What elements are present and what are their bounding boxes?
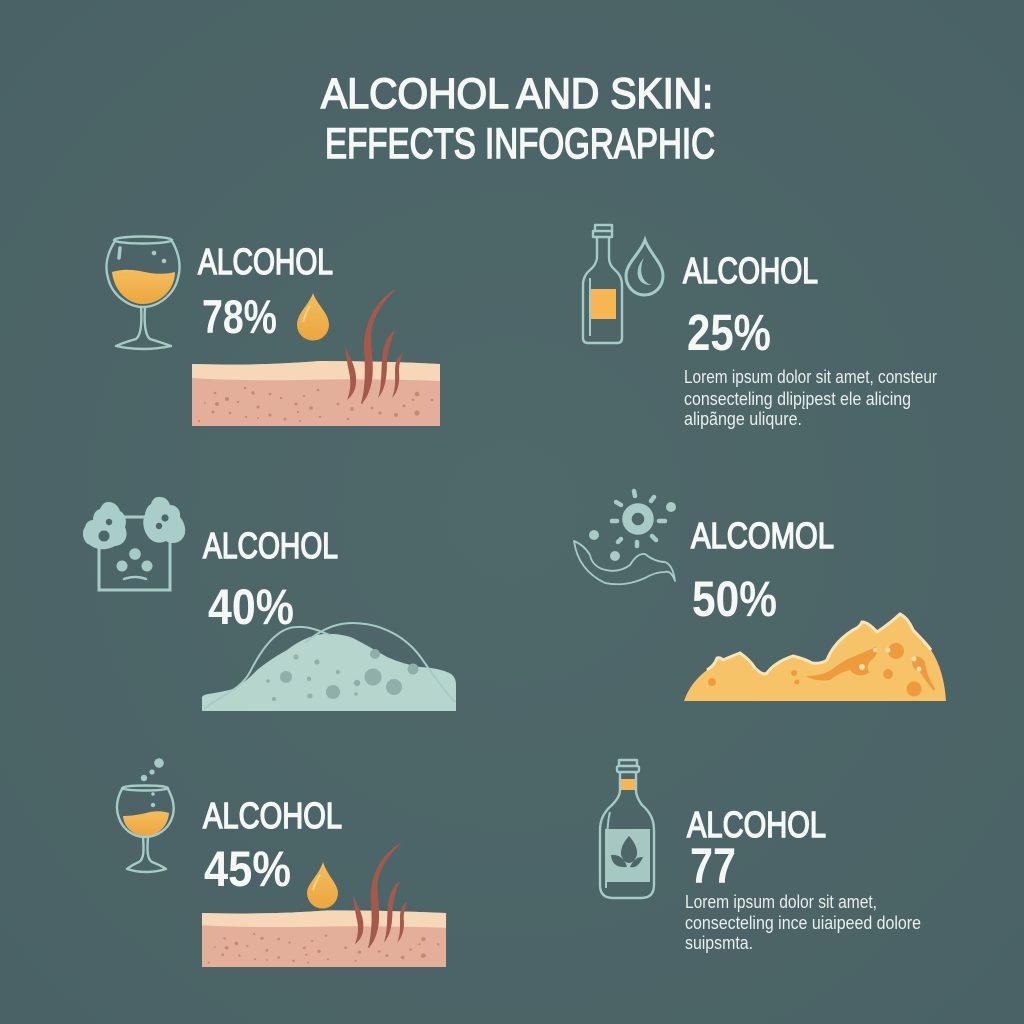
icon: bottle with leaf label bbox=[600, 760, 654, 898]
icon: bottle and drop bbox=[583, 225, 663, 343]
heading: ALCOHOL bbox=[203, 525, 338, 566]
percentage: 40% bbox=[208, 579, 294, 635]
percentage: 45% bbox=[204, 841, 291, 897]
heading: ALCOHOL bbox=[687, 804, 826, 845]
body text bbox=[684, 367, 937, 429]
panel: face 40% bbox=[83, 497, 456, 711]
irritated skin mound bbox=[684, 614, 946, 701]
heading: ALCOMOL bbox=[691, 515, 834, 556]
hair strands bbox=[353, 842, 407, 948]
title: EFFECTS INFOGRAPHIC bbox=[325, 120, 715, 168]
skin cross-section bbox=[202, 910, 446, 967]
title bbox=[321, 70, 715, 168]
icon: drop bbox=[297, 293, 329, 340]
body text: consecteling ince uiaipeed dolore bbox=[685, 913, 921, 933]
icon: sun and wave bbox=[574, 491, 676, 584]
hair strands bbox=[345, 288, 403, 404]
icon: acne face bbox=[83, 497, 185, 590]
icon: wine glass with bubbles bbox=[117, 758, 174, 872]
panel: sun 50% bbox=[574, 491, 946, 701]
title: ALCOHOL AND SKIN: bbox=[321, 70, 713, 118]
body text: alipãnge uliqure. bbox=[684, 409, 802, 429]
percentage: 25% bbox=[687, 304, 771, 361]
number: 77 bbox=[690, 838, 736, 894]
body text bbox=[685, 892, 921, 953]
skin cross-section bbox=[192, 361, 440, 426]
percentage: 50% bbox=[692, 571, 777, 627]
panel: bottle 77 bbox=[600, 760, 921, 953]
skin mound bbox=[202, 623, 456, 711]
heading: ALCOHOL bbox=[198, 241, 333, 282]
panel: wine glass 45% bbox=[117, 758, 446, 967]
body text: Lorem ipsum dolor sit amet, bbox=[685, 892, 877, 912]
heading: ALCOHOL bbox=[203, 795, 342, 836]
body text: consecteling dlipįpest ele alicing bbox=[684, 389, 911, 409]
body text: Lorem ipsum dolor sit amet, consteur bbox=[684, 367, 937, 387]
panel: bottle 25% bbox=[583, 225, 937, 429]
heading: ALCOHOL bbox=[683, 250, 818, 291]
panel: wine glass 78% bbox=[106, 236, 440, 426]
body text: suipsmta. bbox=[685, 933, 753, 953]
icon: wine glass bbox=[106, 236, 180, 349]
percentage: 78% bbox=[202, 290, 277, 343]
icon: drop bbox=[307, 862, 338, 908]
